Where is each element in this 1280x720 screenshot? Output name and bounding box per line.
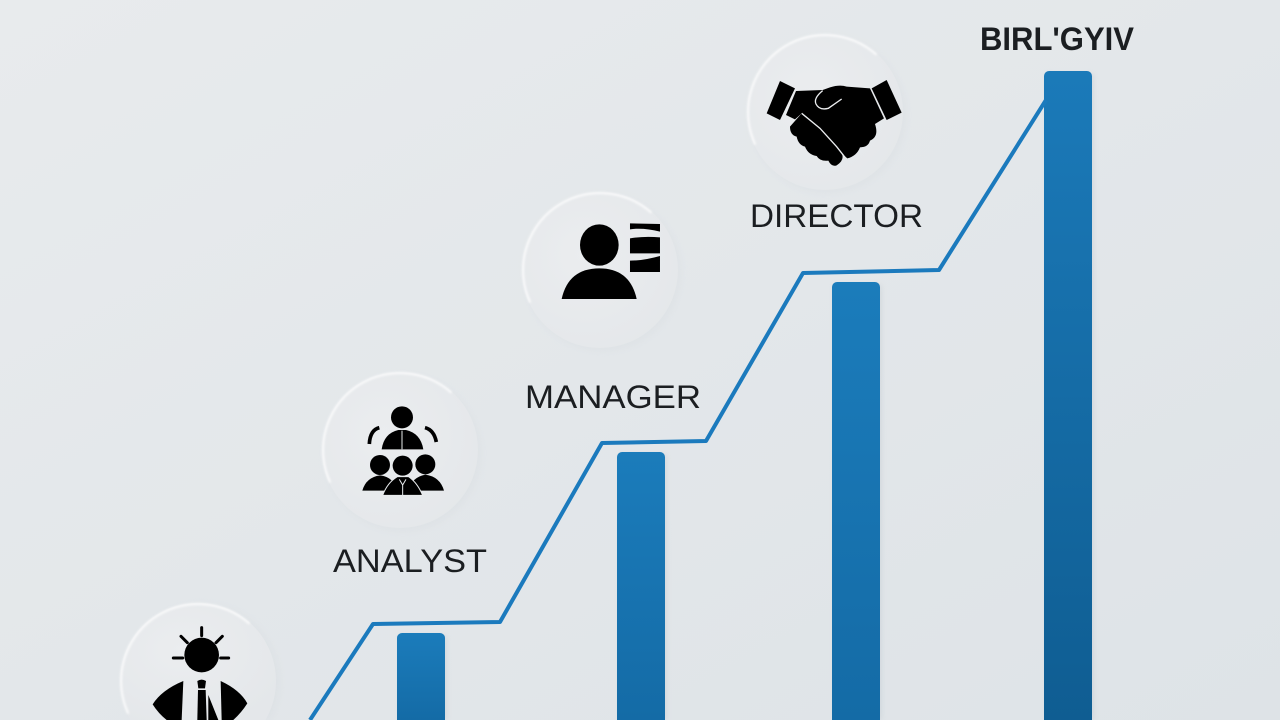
stepped growth line	[310, 100, 1046, 720]
label: top level (garbled heading): BIRL'GYIV	[980, 21, 1135, 57]
bar: step 3	[617, 452, 666, 720]
label: manager: MANAGER	[525, 379, 701, 415]
bar: step 4	[832, 282, 881, 720]
step: director icon	[747, 34, 923, 234]
step: analyst icon	[322, 372, 487, 579]
bar: step 5	[1044, 71, 1093, 720]
step: entry level icon	[120, 603, 280, 720]
step: manager icon	[522, 192, 701, 415]
label: analyst: ANALYST	[333, 543, 487, 579]
label: director: DIRECTOR	[750, 198, 923, 234]
bar: step 2	[397, 633, 446, 720]
